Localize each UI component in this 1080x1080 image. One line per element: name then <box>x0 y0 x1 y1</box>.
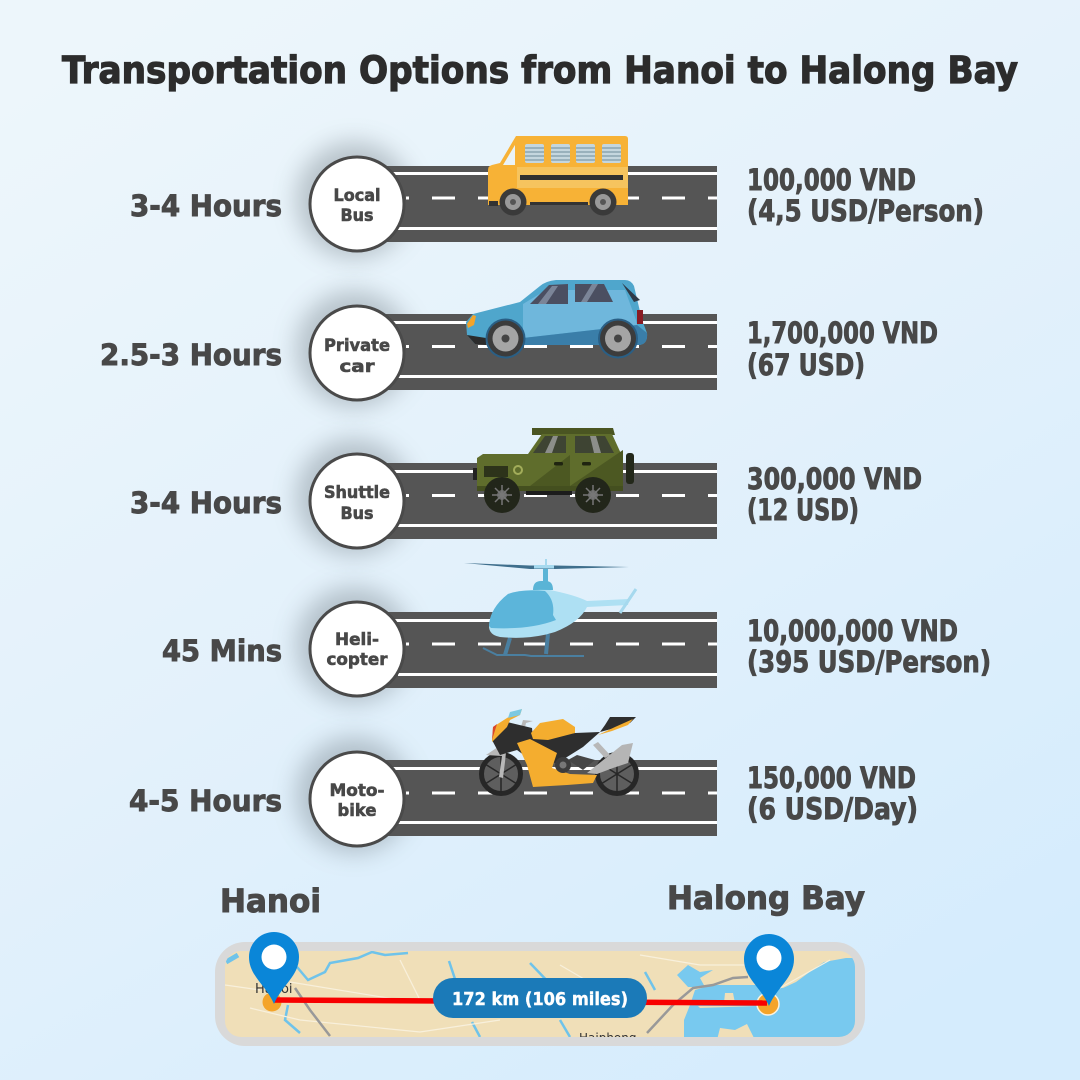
distance pill: 172 km (106 miles) <box>452 989 628 1010</box>
icon: green jeep <box>473 428 634 513</box>
icon: helicopter <box>464 559 636 656</box>
row: motorbike <box>129 709 918 853</box>
duration: 3-4 Hours <box>130 189 282 223</box>
price: 1,700,000 VND <box>747 316 938 350</box>
price <box>747 614 991 679</box>
label circle: Shuttle <box>324 483 390 503</box>
road <box>380 314 717 390</box>
price: 300,000 VND <box>747 462 922 496</box>
map land <box>225 951 855 1037</box>
label circle <box>310 454 404 548</box>
duration: 3-4 Hours <box>130 486 282 520</box>
origin dot <box>262 992 282 1012</box>
pin: Hanoi <box>249 932 299 1004</box>
pin: Halong Bay <box>744 934 794 1006</box>
label circle: bike <box>338 801 376 821</box>
icon: yellow bus <box>488 136 628 216</box>
label circle: Bus <box>340 206 374 226</box>
label circle: Local <box>334 186 380 206</box>
map text: Hanoi: Hanoi <box>255 982 293 997</box>
icon: motorcycle <box>482 709 636 794</box>
label circle: Private <box>324 336 390 356</box>
map highway <box>295 977 748 1036</box>
label circle shadow <box>296 291 412 407</box>
price <box>747 316 938 382</box>
map water <box>684 958 860 1040</box>
map text: Haiphong: Haiphong <box>579 1031 636 1045</box>
distance pill <box>433 978 647 1018</box>
map rivers <box>226 952 655 1037</box>
label circle shadow <box>296 142 412 258</box>
label circle: Moto- <box>330 781 384 801</box>
route map <box>215 932 865 1046</box>
road <box>380 760 717 836</box>
price: 10,000,000 VND <box>747 614 958 648</box>
label circle shadow <box>296 587 412 703</box>
price: 100,000 VND <box>747 163 916 197</box>
map contents <box>225 951 860 1045</box>
road <box>380 612 717 688</box>
price: (67 USD) <box>747 348 865 382</box>
price: 150,000 VND <box>747 761 916 795</box>
duration: 45 Mins <box>162 634 282 668</box>
duration: 2.5-3 Hours <box>100 338 282 372</box>
icon: blue car <box>466 280 647 358</box>
road <box>380 463 717 539</box>
row: shuttle bus <box>130 428 922 555</box>
map inlet <box>677 965 713 987</box>
label circle: Heli- <box>335 630 379 650</box>
duration: 4-5 Hours <box>129 784 282 818</box>
price: (395 USD/Person) <box>747 645 991 679</box>
label: Halong Bay: Halong Bay <box>667 879 865 917</box>
label circle shadow <box>296 737 412 853</box>
destination dot <box>757 993 779 1015</box>
row: private car <box>100 280 938 407</box>
map islands <box>698 993 757 1040</box>
price <box>747 462 922 527</box>
label circle shadow <box>296 439 412 555</box>
map frame <box>215 942 865 1046</box>
label circle <box>310 306 404 400</box>
price: (4,5 USD/Person) <box>747 194 984 228</box>
map roads <box>225 955 830 1032</box>
label circle <box>310 602 404 696</box>
label circle <box>310 157 404 251</box>
price: (12 USD) <box>747 493 859 527</box>
label circle <box>310 752 404 846</box>
row: helicopter <box>162 559 991 703</box>
title: Transportation Options from Hanoi to Halong Bay <box>62 49 1018 92</box>
label circle: Bus <box>340 504 374 524</box>
road <box>380 166 717 242</box>
price: (6 USD/Day) <box>747 792 918 826</box>
price <box>747 163 984 228</box>
label circle: copter <box>326 650 388 670</box>
label circle: car <box>340 357 375 377</box>
price <box>747 761 918 826</box>
route line <box>274 1000 767 1003</box>
row: local bus <box>130 136 984 258</box>
label: Hanoi: Hanoi <box>220 882 321 920</box>
